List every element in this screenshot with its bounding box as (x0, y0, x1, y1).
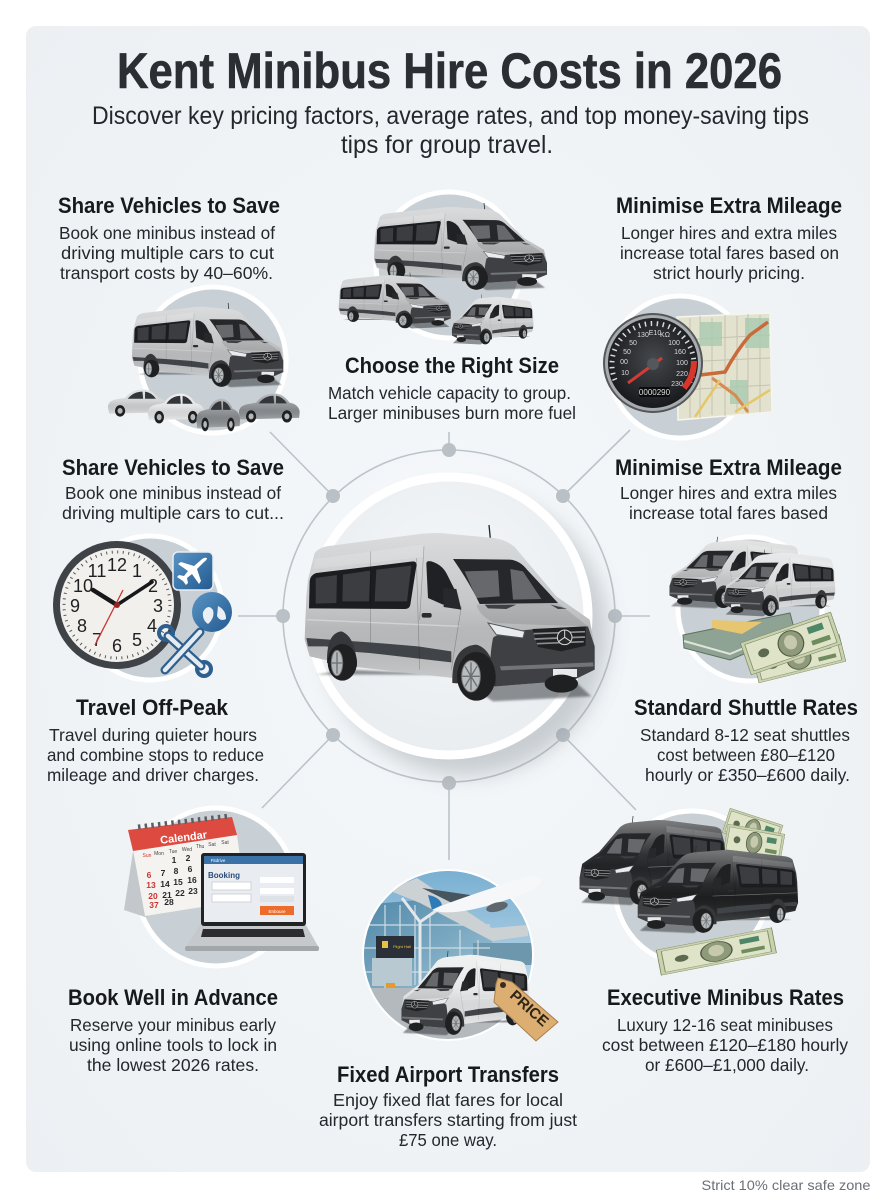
clock: 5 (132, 630, 142, 650)
heading: travel off-peak: Travel Off-Peak (76, 695, 229, 720)
calendar: 6 (147, 870, 152, 880)
map (677, 313, 772, 420)
text: share vehicles top (59, 223, 275, 283)
airport van (401, 951, 529, 1035)
calendar: 23 (188, 886, 198, 896)
central hub with minibus (305, 477, 608, 776)
heading: share vehicles middle: Share Vehicles to Save (62, 455, 284, 480)
calendar: Thu (196, 844, 205, 850)
icon: speedometer and map (604, 296, 772, 438)
calendar: 15 (173, 877, 183, 887)
text: minimise mileage top (620, 223, 839, 283)
clock: 3 (153, 596, 163, 616)
text: choose the right size: Match vehicle capacity to group. (328, 383, 571, 403)
calendar: 37 (149, 900, 159, 910)
text: fixed airport transfers (319, 1090, 577, 1150)
calendar: Mon (154, 851, 164, 857)
subtitle: tips for group travel. (341, 131, 553, 159)
calendar: 1 (172, 855, 177, 865)
calendar: Sat (208, 842, 216, 848)
heading: minimise mileage top: Minimise Extra Mileage (616, 193, 842, 218)
text: minimise mileage top: increase total fares based on (620, 243, 839, 263)
icon: speedometer and map: 0000290 (639, 388, 671, 397)
icon: speedometer and map: 220 (676, 371, 688, 378)
calendar: 13 (146, 880, 156, 890)
calendar: 28 (164, 897, 174, 907)
clock: 11 (88, 561, 106, 581)
calendar: 8 (174, 866, 179, 876)
calendar: 2 (186, 853, 191, 863)
icon: speedometer and map: 130 (637, 332, 649, 339)
text: travel off-peak: Travel during quieter hours (49, 725, 257, 745)
text: minimise mileage middle (620, 483, 837, 523)
plane badge (173, 552, 213, 590)
text: executive minibus rates (602, 1015, 848, 1075)
icon: speedometer and map: E10 (649, 330, 661, 337)
text: book well in advance (69, 1015, 277, 1075)
icon: speedometer and map: 10 (621, 370, 629, 377)
clock: 2 (148, 576, 158, 596)
text: travel off-peak (47, 725, 264, 785)
text: travel off-peak: and combine stops to reduce (47, 745, 264, 765)
text: standard shuttle rates (640, 725, 850, 785)
text: fixed airport transfers: Enjoy fixed flat fares for local (333, 1090, 563, 1110)
heading: book well in advance: Book Well in Advance (68, 985, 278, 1010)
text: fixed airport transfers: £75 one way. (399, 1130, 497, 1150)
heading: executive minibus rates: Executive Minibus Rates (607, 985, 844, 1010)
calendar: 21 (162, 890, 172, 900)
text: share vehicles top: Book one minibus instead of (59, 223, 275, 243)
icon: speedometer and map: 160 (674, 349, 686, 356)
text: executive minibus rates: or £600–£1,000 daily. (645, 1055, 809, 1075)
calendar: 6 (188, 864, 193, 874)
text: share vehicles top: driving multiple cars to cut (61, 243, 274, 263)
heading: choose the right size: Choose the Right Size (345, 353, 559, 378)
clock: 8 (77, 616, 87, 636)
speedometer (604, 314, 702, 412)
heading: fixed airport transfers: Fixed Airport Transfers (337, 1062, 559, 1087)
text: executive minibus rates: cost between £120–£180 hourly (602, 1035, 848, 1055)
clock: 1 (132, 561, 142, 581)
laptop (185, 853, 319, 951)
laptop: Fitdrive (211, 858, 226, 863)
calendar (124, 816, 246, 918)
text: minimise mileage middle: Longer hires and extra miles (620, 483, 837, 503)
calendar: Tue (169, 849, 177, 855)
title: Kent Minibus Hire Costs in 2026 (117, 43, 782, 99)
text: book well in advance: Reserve your minibus early (70, 1015, 276, 1035)
text: standard shuttle rates: hourly or £350–£600 daily. (645, 765, 850, 785)
price tag (494, 978, 558, 1041)
calendar: Sun (143, 853, 152, 859)
clock: 4 (147, 616, 157, 636)
clock: 10 (73, 576, 93, 596)
text: choose the right size: Larger minibuses burn more fuel (328, 403, 576, 423)
icon: speedometer and map: 50 (629, 340, 637, 347)
calendar: Calendar (160, 829, 208, 847)
text: share vehicles middle: Book one minibus instead of (65, 483, 281, 503)
heading: standard shuttle rates: Standard Shuttle Rates (634, 695, 858, 720)
calendar: Sat (221, 840, 229, 846)
icon: speedometer and map: 100 (676, 360, 688, 367)
terminal (360, 878, 536, 1040)
icon: central silver minibus (305, 525, 595, 701)
laptop: Booking (208, 871, 240, 880)
icon: speedometer and map: 50 (623, 349, 631, 356)
laptop: Enboure (268, 909, 286, 914)
text: minimise mileage top: Longer hires and extra miles (621, 223, 837, 243)
text: minimise mileage middle: increase total fares based (629, 503, 828, 523)
clock: 7 (92, 630, 102, 650)
text: minimise mileage top: strict hourly pricing. (653, 263, 805, 283)
hub connector diagram (238, 430, 650, 860)
globe badge (192, 592, 232, 632)
heading: minimise mileage middle: Minimise Extra Mileage (615, 455, 842, 480)
calendar: 20 (148, 891, 158, 901)
calendar: 16 (187, 875, 197, 885)
wrench and screwdriver (159, 626, 211, 676)
icon: choose the right size vans (339, 192, 547, 345)
icon: calendar and booking laptop (124, 808, 319, 966)
icon: minibus and cars (108, 287, 300, 433)
text: share vehicles middle: driving multiple cars to cut... (62, 503, 284, 523)
text: standard shuttle rates: Standard 8-12 seat shuttles (640, 725, 850, 745)
text: standard shuttle rates: cost between £80–£120 (657, 745, 835, 765)
text: share vehicles top: transport costs by 40–60%. (60, 263, 273, 283)
subtitle (92, 102, 809, 159)
terminal: Flight Hall (393, 944, 411, 949)
text: fixed airport transfers: airport transfers starting from just (319, 1110, 577, 1130)
price tag: PRICE (506, 987, 552, 1030)
icon: clock with travel badges (53, 536, 232, 680)
clock (53, 541, 181, 669)
text: choose the right size (328, 383, 576, 423)
icon: shuttles and cash (670, 537, 846, 683)
clock: 9 (70, 596, 80, 616)
calendar: 7 (161, 868, 166, 878)
text: travel off-peak: mileage and driver charges. (47, 765, 259, 785)
text: share vehicles middle (62, 483, 284, 523)
cash stack (683, 613, 795, 660)
clock: 12 (107, 555, 127, 575)
icon: speedometer and map: KΩ (660, 332, 670, 339)
airplane (422, 876, 541, 914)
icon: speedometer and map: 00 (620, 359, 628, 366)
heading: share vehicles top: Share Vehicles to Save (58, 193, 280, 218)
calendar: Wed (182, 847, 192, 853)
icon: speedometer and map: 230 (671, 381, 683, 388)
icon: executive black minibuses and cash (580, 808, 798, 976)
text: book well in advance: the lowest 2026 rates. (87, 1055, 259, 1075)
icon: airport terminal with van and price tag (360, 869, 558, 1041)
subtitle: Discover key pricing factors, average rates, and top money-saving tips (92, 102, 809, 130)
calendar: 14 (160, 879, 170, 889)
calendar: 22 (175, 888, 185, 898)
text: executive minibus rates: Luxury 12-16 seat minibuses (617, 1015, 833, 1035)
clock: 6 (112, 636, 122, 656)
footer note: Strict 10% clear safe zone (702, 1177, 871, 1193)
text: book well in advance: using online tools to lock in (69, 1035, 277, 1055)
icon: speedometer and map: 100 (668, 340, 680, 347)
